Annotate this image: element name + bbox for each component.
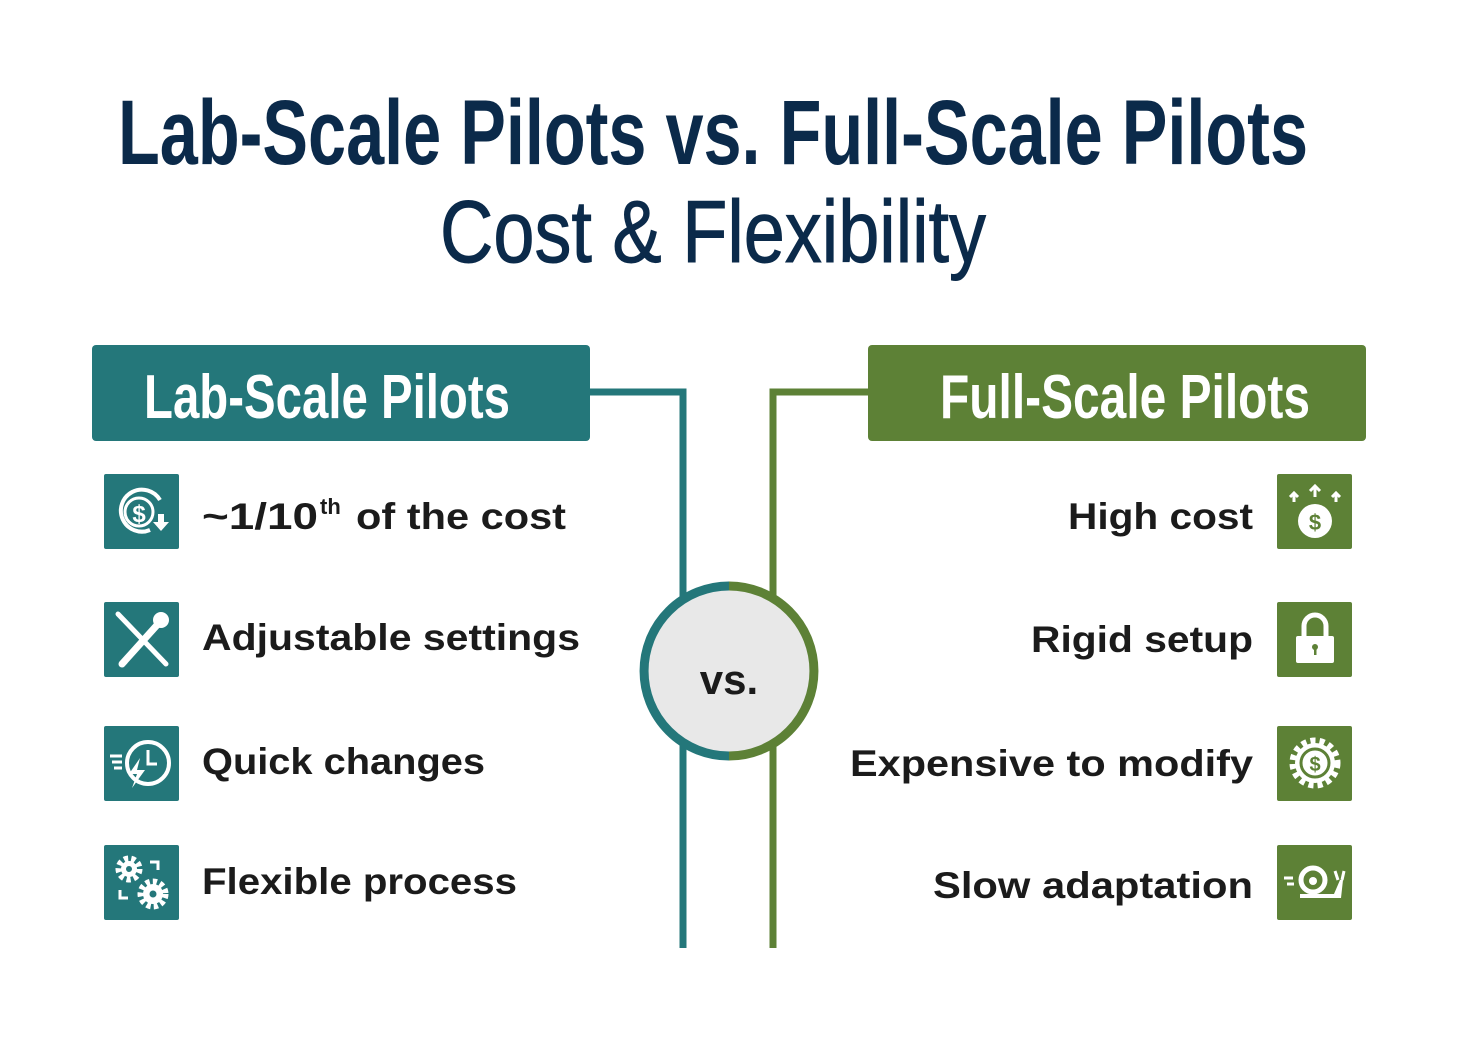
icon: money up: $: [1309, 510, 1321, 535]
header: Full-Scale Pilots: Full-Scale Pilots: [940, 363, 1310, 432]
title: [118, 82, 1308, 281]
connector: green line: [773, 392, 870, 948]
connector: teal line: [588, 392, 683, 948]
text: cost: [202, 494, 566, 537]
text: expensive: Expensive to modify: [850, 743, 1253, 784]
icon: gears: [104, 845, 179, 920]
text: cost: of the cost: [356, 496, 566, 537]
text: slow: Slow adaptation: [933, 865, 1253, 906]
text: adjustable: Adjustable settings: [202, 617, 580, 658]
text: cost: th: [320, 494, 341, 519]
icon: dollar down: [104, 474, 179, 549]
vs circle: vs.: [700, 656, 758, 703]
text: high cost: High cost: [1068, 496, 1253, 537]
header: Full-Scale Pilots: [868, 345, 1366, 441]
header: Lab-Scale Pilots: [92, 345, 590, 441]
text: quick: Quick changes: [202, 741, 485, 782]
icon: money up: [1277, 474, 1352, 549]
icon: tools: [104, 602, 179, 677]
text: flexible: Flexible process: [202, 861, 517, 902]
vs circle: [644, 586, 814, 756]
header: Lab-Scale Pilots: Lab-Scale Pilots: [144, 363, 510, 432]
icon: snail: [1277, 845, 1352, 920]
icon: dollar down: $: [132, 501, 146, 528]
title: Cost & Flexibility: [440, 182, 986, 281]
icon: gear dollar: $: [1309, 754, 1321, 776]
text: cost: ~1/10: [202, 496, 318, 537]
text: rigid: Rigid setup: [1031, 619, 1253, 660]
icon: lock: [1277, 602, 1352, 677]
icon: gear dollar: [1277, 726, 1352, 801]
icon: quick clock: [104, 726, 179, 801]
